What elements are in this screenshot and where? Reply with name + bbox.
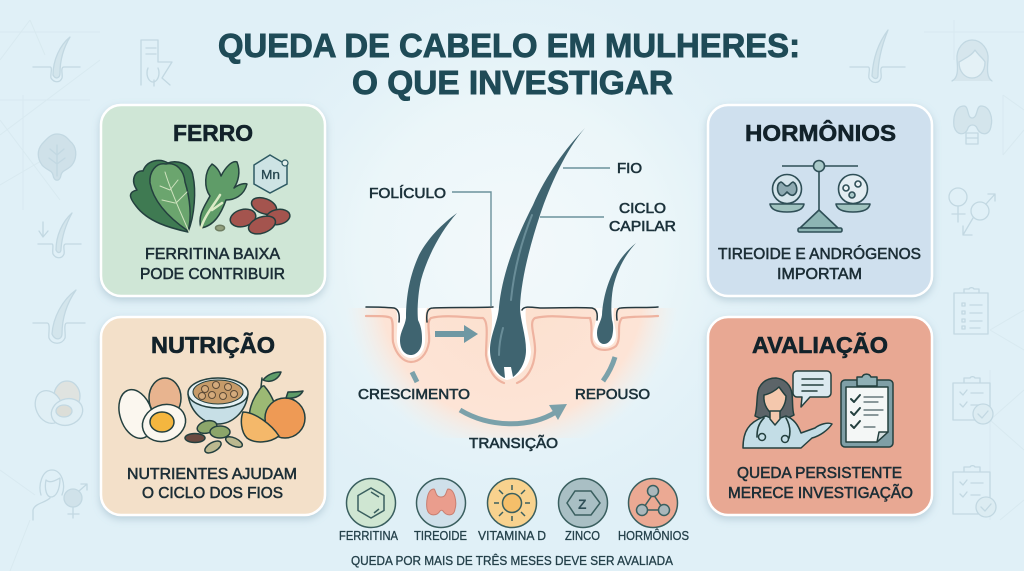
label: folículo: FOLÍCULO	[369, 185, 446, 202]
icon: tireoide	[416, 478, 466, 528]
icon: pear, orange and melon	[241, 372, 305, 442]
panel: hormônios	[708, 105, 932, 296]
icon: bowl of chickpeas	[188, 378, 248, 424]
hair: right	[597, 243, 636, 344]
heading: ferro: FERRO	[173, 120, 253, 146]
label: ciclo capilar	[609, 201, 676, 235]
footer note: QUEDA POR MAIS DE TRÊS MESES DEVE SER AVALIADA	[351, 553, 674, 568]
label: transição: TRANSIÇÃO	[469, 435, 558, 452]
icon: eggs	[113, 378, 191, 447]
hair diagram	[345, 128, 680, 452]
icon: Mn hexagon: Mn	[261, 167, 280, 182]
heading: hormônios: HORMÔNIOS	[745, 119, 896, 146]
text: nutrientes: NUTRIENTES AJUDAM	[127, 466, 297, 483]
icon: speech bubble	[793, 371, 831, 407]
icon labels: TIREOIDE	[414, 529, 467, 543]
icon labels: VITAMINA D	[478, 529, 546, 543]
background icon: thyroid	[954, 106, 992, 144]
text: ferritina	[140, 246, 285, 283]
skin	[345, 308, 680, 438]
background icon: document and anatomy	[141, 40, 172, 86]
label: ciclo capilar: CAPILAR	[609, 219, 676, 235]
text: nutrientes	[127, 466, 297, 502]
icon: large spinach	[130, 160, 195, 232]
icon row	[339, 478, 689, 543]
title: QUEDA DE CABELO EM MULHERES:	[218, 27, 800, 64]
background icon: hair follicle top left	[33, 37, 80, 82]
icon: vitamina d	[488, 478, 536, 528]
arrow: follicle growth	[435, 325, 478, 343]
panel: avaliação	[708, 317, 932, 515]
text: tireoide: IMPORTAM	[777, 266, 862, 283]
text: ferritina: PODE CONTRIBUIR	[140, 266, 285, 283]
icon: zinco: Z	[578, 496, 587, 512]
text: nutrientes: O CICLO DOS FIOS	[142, 485, 283, 502]
background icon: leaf	[38, 134, 76, 180]
icon: ferritina	[346, 478, 396, 528]
text: queda persistente: QUEDA PERSISTENTE	[737, 465, 902, 482]
label: ciclo capilar: CICLO	[619, 201, 666, 217]
panel: nutrição	[101, 317, 325, 515]
icon: small spinach	[200, 162, 247, 228]
icon labels: ZINCO	[565, 529, 600, 543]
background icon: hair loss arrow	[38, 213, 81, 258]
icon: hormônios	[628, 478, 678, 528]
leader lines	[452, 168, 610, 306]
panel: ferro	[101, 105, 325, 296]
hair: center	[490, 128, 585, 378]
label: crescimento: CRESCIMENTO	[358, 387, 470, 403]
icon labels: FERRITINA	[339, 529, 399, 543]
cycle arrows	[412, 357, 615, 424]
icon: balance scale	[770, 160, 870, 232]
background icon: woman and gender symbol	[33, 470, 87, 520]
text: tireoide	[718, 246, 921, 283]
icon: beans	[216, 195, 291, 237]
text: queda persistente	[728, 465, 913, 502]
icon: clipboard	[841, 374, 893, 447]
background icon: clipboard check	[953, 377, 993, 424]
background icon: hair follicle middle	[33, 290, 85, 343]
icon: beans and seeds	[185, 419, 244, 455]
title: O QUE INVESTIGAR	[352, 64, 673, 101]
text: queda persistente: MERECE INVESTIGAÇÃO	[728, 485, 913, 502]
heading: avaliação: AVALIAÇÃO	[752, 331, 888, 358]
background icon: clipboard check lower	[953, 466, 996, 517]
hair: left	[400, 213, 457, 355]
label: fio: FIO	[617, 161, 642, 177]
text: tireoide: TIREOIDE E ANDRÓGENOS	[718, 246, 921, 263]
background icon: gender symbols	[949, 188, 995, 235]
background icon: clipboard list	[954, 288, 988, 334]
background icon: woman	[952, 40, 992, 81]
title	[218, 27, 800, 101]
icon: Mn hexagon	[254, 155, 288, 193]
background icon: hair follicle top right	[850, 30, 905, 82]
icon labels	[339, 528, 689, 543]
text: ferritina: FERRITINA BAIXA	[145, 246, 281, 263]
skin surface line	[366, 307, 658, 322]
icon: zinco	[558, 478, 608, 528]
background icon: eggs	[30, 381, 86, 430]
icon: doctor	[743, 378, 832, 448]
heading: nutrição: NUTRIÇÃO	[151, 331, 275, 358]
icon labels: HORMÔNIOS	[618, 528, 689, 543]
label: repouso: REPOUSO	[575, 387, 650, 403]
follicle openings	[396, 308, 616, 380]
